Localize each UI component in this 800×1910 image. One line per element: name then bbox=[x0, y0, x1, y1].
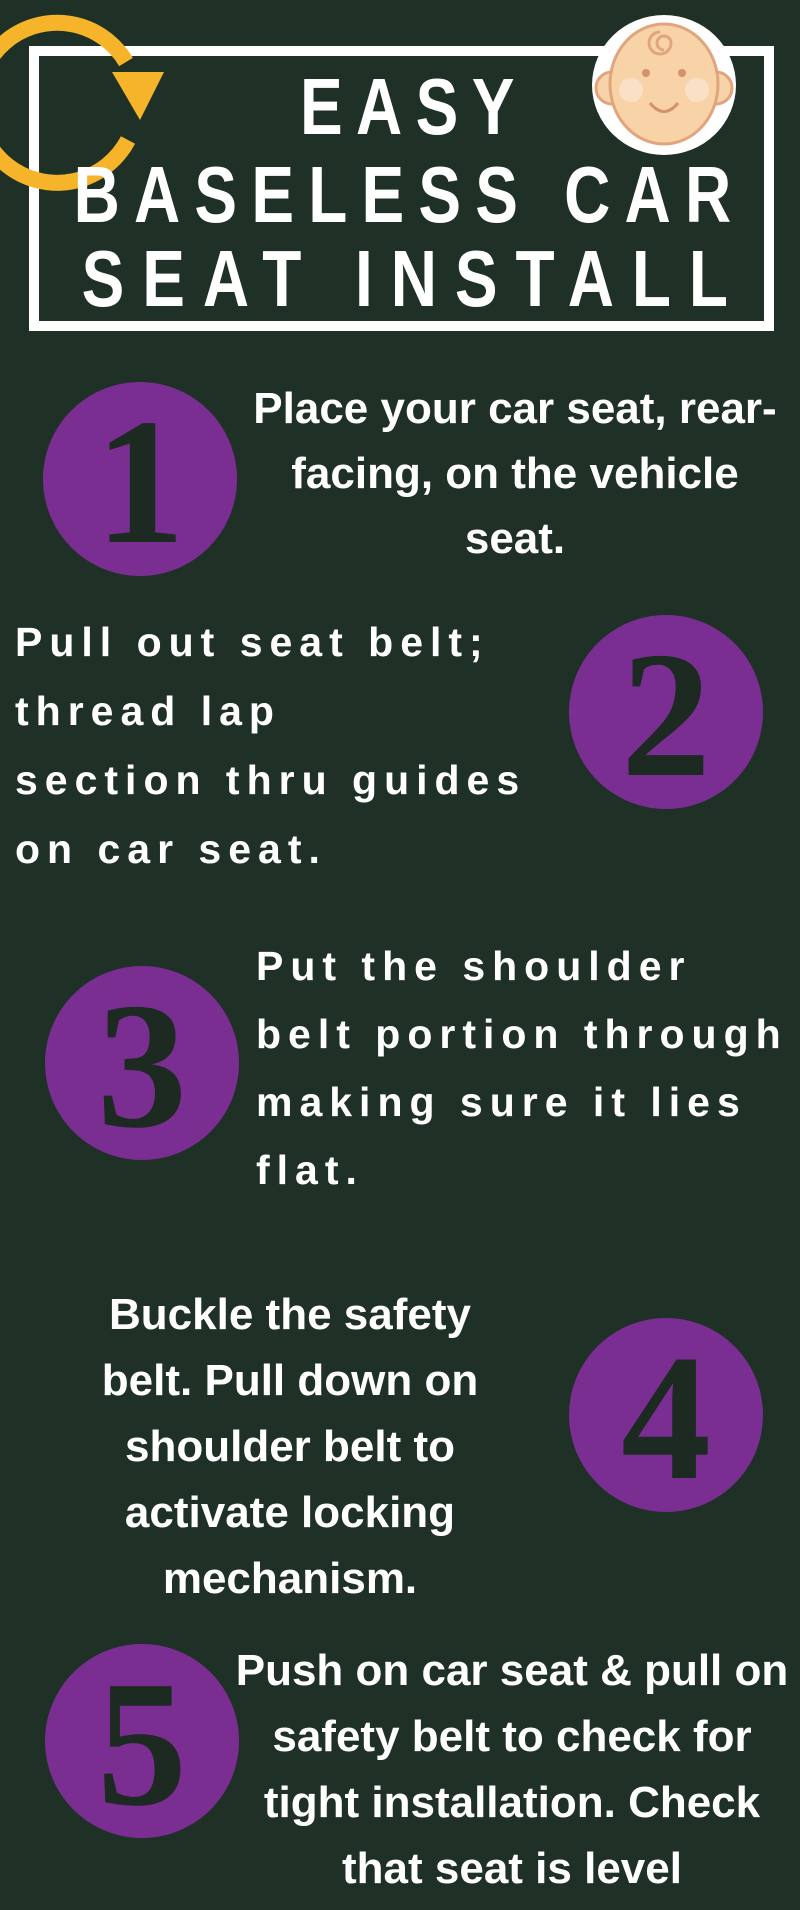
step 2 number bbox=[569, 615, 763, 809]
step 2 text: on car seat. bbox=[15, 826, 327, 872]
step 2 text: section thru guides bbox=[15, 757, 526, 803]
step 1 number: 1 bbox=[95, 382, 185, 581]
step 5 number: 5 bbox=[97, 1644, 187, 1843]
step 4 text: shoulder belt to bbox=[125, 1422, 455, 1471]
step 5 text: tight installation. Check bbox=[264, 1778, 760, 1827]
step 2 text bbox=[15, 619, 526, 872]
step 1 text: seat. bbox=[465, 514, 565, 563]
step 3 text: belt portion through bbox=[256, 1011, 788, 1057]
step 3 text: Put the shoulder bbox=[256, 943, 691, 989]
step 4 text: mechanism. bbox=[163, 1554, 417, 1603]
step 4 number bbox=[569, 1318, 763, 1512]
step 4 text: activate locking bbox=[125, 1488, 455, 1537]
step 2 number: 2 bbox=[621, 615, 711, 814]
step 4 number: 4 bbox=[621, 1318, 711, 1517]
step 4 text: belt. Pull down on bbox=[102, 1356, 478, 1405]
icon: baby face bbox=[592, 15, 736, 155]
step 4 text: Buckle the safety bbox=[109, 1290, 471, 1339]
title text: BASELESS CAR bbox=[74, 150, 731, 240]
title text bbox=[74, 62, 731, 324]
step 3 text: making sure it lies bbox=[256, 1079, 747, 1125]
step 4 text bbox=[102, 1290, 478, 1603]
title text: SEAT INSTALL bbox=[82, 234, 728, 324]
title frame bbox=[34, 51, 769, 326]
step 5 text: that seat is level bbox=[342, 1844, 682, 1893]
step 1 number bbox=[43, 382, 237, 576]
step 3 number bbox=[45, 966, 239, 1160]
step 1 text bbox=[253, 384, 777, 563]
step 5 text: safety belt to check for bbox=[272, 1712, 752, 1761]
step 2 text: thread lap bbox=[15, 688, 281, 734]
step 5 number bbox=[45, 1644, 239, 1838]
step 3 text bbox=[256, 943, 788, 1193]
step 5 text: Push on car seat & pull on bbox=[236, 1646, 788, 1695]
step 5 text bbox=[236, 1646, 788, 1893]
step 1 text: facing, on the vehicle bbox=[291, 449, 739, 498]
step 3 text: flat. bbox=[256, 1147, 364, 1193]
title text: EASY bbox=[300, 62, 514, 152]
step 1 text: Place your car seat, rear- bbox=[253, 384, 777, 433]
header: title box with icons bbox=[0, 14, 774, 331]
step 2 text: Pull out seat belt; bbox=[15, 619, 490, 665]
step 3 number: 3 bbox=[97, 966, 187, 1165]
icon: yellow circular arrow bbox=[0, 23, 164, 183]
